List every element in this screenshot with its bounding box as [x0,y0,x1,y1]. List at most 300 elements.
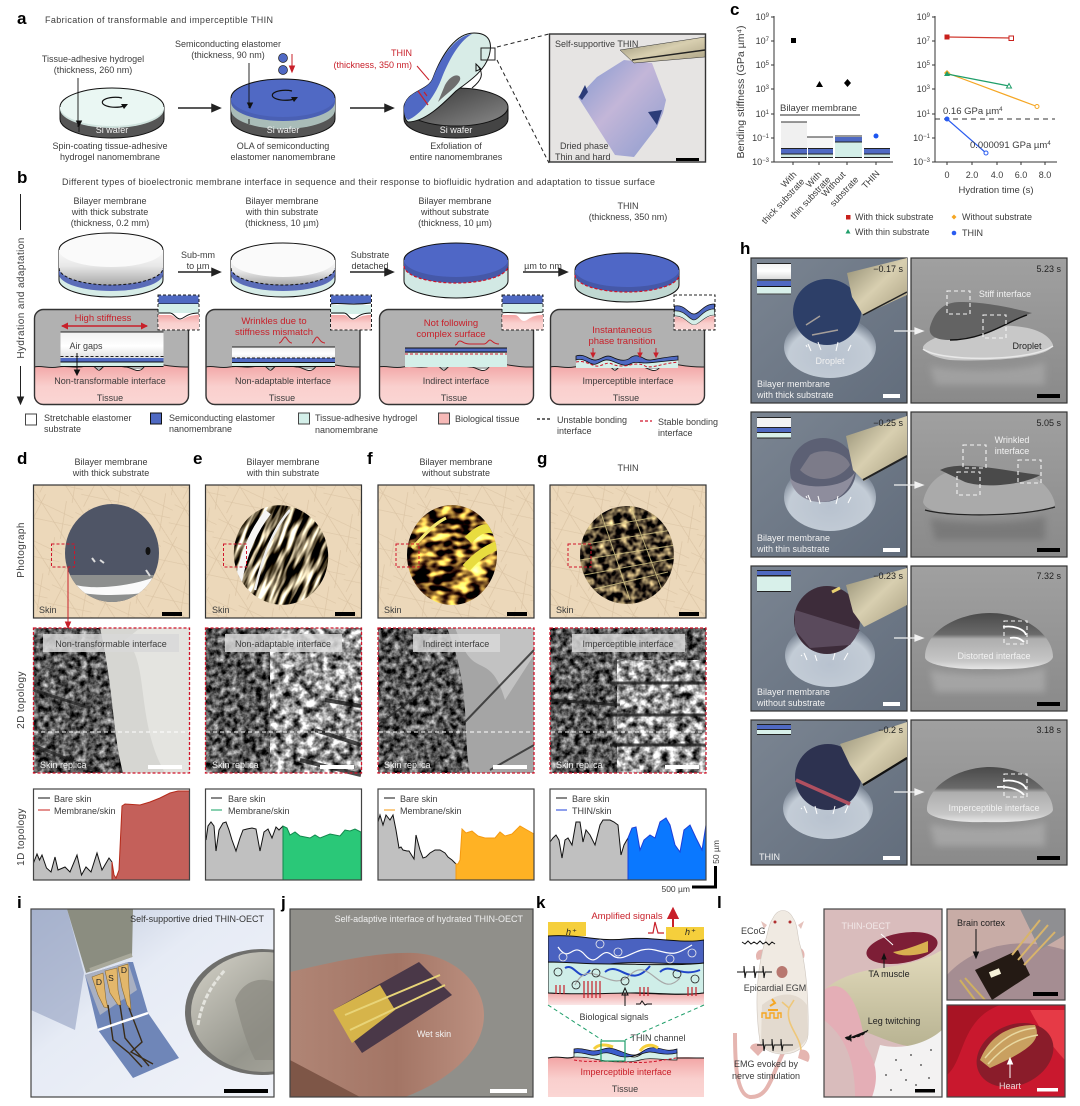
photo d: Skin [39,605,57,615]
series: without substrate [944,70,1039,108]
column 3 header [418,196,492,228]
right chart: axes and tick labels: 5 [927,61,931,67]
column 3 header: Bilayer membrane [418,196,492,206]
step 2 caption: OLA of semiconducting [237,141,329,151]
step 2 thickness: (thickness, 90 nm) [191,50,265,60]
left chart: axes and tick labels: 1 [766,110,770,116]
photo j: Self-adaptive interface of hydrated THIN-OECT [335,914,523,924]
legend [846,212,1032,238]
series: THIN [944,116,988,155]
left chart: axes and tick labels: 10 [752,133,762,143]
row 3 right photo [911,566,1067,711]
step 3 red thickness: (thickness, 350 nm) [333,60,412,70]
header g: THIN [618,463,638,473]
panel b: membrane interface types [16,168,718,438]
arrow: substrate detached: detached [351,261,389,271]
2D image e: Skin replica [212,760,259,770]
row 4 right photo [911,720,1067,865]
row 2 right photo: interface [995,446,1029,456]
label: photograph: Photograph [16,522,27,578]
row 3 left photo [751,566,907,711]
step 1 thickness: (thickness, 260 nm) [54,65,132,75]
photo j [290,909,533,1097]
2D image g: Imperceptible interface [582,639,674,649]
row 2 left photo: with thin substrate [756,544,830,554]
inset 1 [158,295,199,330]
legend: THIN [962,228,983,238]
row 1 right photo: 5.23 s [1036,264,1061,274]
legend: nanomembrane [169,424,232,434]
header d: Bilayer membrane [74,457,148,467]
row 3 left photo: −0.23 s [873,571,903,581]
left chart: axes and tick labels: 10 [756,84,766,94]
step 2 caption line 2: elastomer nanomembrane [230,152,336,162]
1D profile f: Bare skin [400,794,438,804]
legend: Unstable bonding [557,415,627,425]
inset 4 [674,295,715,330]
row 1 left photo: Droplet [815,356,845,366]
interface box 3 [379,309,534,405]
left chart: axes and tick labels: 10 [756,109,766,119]
row 4 left photo: THIN [759,852,780,862]
tissue label: Tissue [612,1084,638,1094]
2D image f [378,628,534,773]
1D profile g: Bare skin [572,794,610,804]
vertical axis: hydration and adaptation: Hydration and adaptation [16,237,27,359]
biological signals label: Biological signals [579,1012,649,1022]
row 3 right photo: Distorted interface [957,651,1031,661]
THIN channel label: THIN channel [630,1033,686,1043]
label: 2D topology: 2D topology [16,671,27,729]
step 1 disc: hydrogel spin-coating [60,78,164,138]
step 2 disc: semiconducting elastomer [231,54,335,138]
letter j: j [280,893,286,912]
column 1 header [71,196,149,228]
interface box 4 [550,309,705,405]
row 2 right photo: Wrinkled [995,435,1029,445]
legend: Stable bonding [658,417,718,427]
column 1 header: Bilayer membrane [73,196,147,206]
photo g [550,485,706,618]
biological signal arrow [622,988,652,1006]
step 3 red label: THIN [391,48,412,58]
photo: TA muscle [824,909,942,1097]
row 2 right photo: 5.05 s [1036,418,1061,428]
rat illustration [735,910,810,1097]
row 4 arrow [894,789,923,795]
arrow 2 [350,104,393,112]
letter l: l [717,893,722,912]
right chart: axes and tick labels: 10 [913,133,923,143]
right chart: axes and tick labels: 3 [927,85,931,91]
zoom dashed connectors [481,34,549,163]
column 4 header: THIN [618,201,638,211]
2D image d: Non-transformable interface [55,639,167,649]
legend: Biological tissue [455,414,520,424]
step 1 label: Tissue-adhesive hydrogel [42,54,144,64]
scale bar: 50 µm and 500 µm [661,840,721,894]
channel layer stack: h⁺ [685,927,696,937]
series: with thick substrate [944,34,1014,40]
photo e: Skin [212,605,230,615]
bilayer bracket label: Bilayer membrane [780,103,857,114]
interface box 1: Non-transformable interface [54,376,166,386]
2D image d: Skin replica [40,760,87,770]
right chart: axes and tick labels: 10 [917,84,927,94]
photo i: S [108,973,114,983]
letter i: i [17,893,22,912]
letter d: d [17,449,27,468]
left chart: axes and tick labels: 10 [756,36,766,46]
series: with thin substrate [944,71,1012,88]
right chart: axes and tick labels: 10 [917,60,927,70]
column 2 header: (thickness, 10 µm) [245,218,319,228]
channel layer stack [548,922,704,1010]
label: 1D topology: 1D topology [16,808,27,866]
right chart: axes and tick labels: 1 [927,110,931,116]
panel l: in vivo recordings [717,893,1065,1099]
data markers [791,38,878,138]
interface box 1 [34,309,189,405]
legend: nanomembrane [315,425,378,435]
left chart: axes and tick labels: 5 [766,61,770,67]
row 4 left photo [751,720,907,865]
step 3 caption line 2: entire nanomembranes [410,152,503,162]
interface box 1: Tissue [97,393,123,403]
legend: Semiconducting elastomer [169,413,275,423]
interface box 2: Non-adaptable interface [235,376,331,386]
rotated category labels: thick substrate [760,177,806,226]
legend: Stretchable elastomer [44,413,132,423]
imperceptible label: Imperceptible interface [580,1067,672,1077]
lower interface [548,1041,704,1097]
right chart: axes and tick labels: 10 [917,12,927,22]
left chart: axes and tick labels: 7 [766,37,770,43]
1D profile f [378,789,534,880]
disc 2: thin substrate [231,243,335,297]
photo f [378,485,534,618]
photo i: D [121,965,127,975]
step 3 disc: exfoliation [404,33,508,138]
right chart: axes and tick labels: 10 [913,157,923,167]
row labels d-g [16,522,27,866]
left chart: axes and tick labels: −1 [762,134,770,140]
row 2 left photo: Bilayer membrane [757,533,830,543]
left chart: axes and tick labels: 10 [756,12,766,22]
photo: brain cortex: Brain cortex [957,918,1006,928]
column 2 header: Bilayer membrane [245,196,319,206]
1D profile d: Bare skin [54,794,92,804]
photo: brain cortex [947,909,1065,1000]
panel k: amplification schematic [536,893,704,1097]
1D profile e: Bare skin [228,794,266,804]
left chart: axes and tick labels [752,12,893,167]
column 2 header [245,196,319,228]
left chart: axes and tick labels: 9 [766,13,770,19]
rotated category labels [760,169,881,226]
photo: self-supportive THIN: Thin and hard [555,152,611,162]
row 3 arrow [894,635,923,641]
rotated category labels: With [779,170,798,190]
disc 4: THIN [575,253,679,302]
row 2 left photo [751,412,907,557]
row 1 left photo: Bilayer membrane [757,379,830,389]
EMG trace [757,1039,793,1051]
arrow: sub-mm to µm: Sub-mm [181,250,215,260]
x-axis title: Hydration time (s) [959,185,1033,196]
photo j: Wet skin [417,1029,451,1039]
photo d [34,485,190,618]
EGM label: Epicardial EGM [744,983,806,993]
legend: substrate [44,424,81,434]
row 3 left photo: Bilayer membrane [757,687,830,697]
header f: without substrate [421,468,490,478]
step 2 disc: semiconducting elastomer: Si wafer [267,125,299,135]
rotated category labels: With [804,170,823,190]
panel i: dried THIN-OECT photo [18,896,275,1098]
interface box 3: complex surface [416,329,486,340]
amplification arrow [668,909,678,932]
row 1 arrow [894,328,923,334]
header d: with thick substrate [72,468,149,478]
photo: self-supportive THIN [550,34,706,162]
row 1 right photo: Droplet [1012,341,1042,351]
letter e: e [193,449,202,468]
2D image g [550,628,706,773]
right chart: axes and tick labels: 0 [944,170,950,180]
column 4 header: (thickness, 350 nm) [589,212,667,222]
header e [246,457,320,478]
right chart: axes and tick labels: 10 [917,109,927,119]
rotated category labels: substrate [828,175,860,208]
channel layer stack: h⁺ [566,927,577,937]
2D image f: Indirect interface [423,639,489,649]
vertical axis: hydration and adaptation [16,194,27,404]
photo: self-supportive THIN: Dried phase [560,141,609,151]
arrow: µm to nm: µm to nm [524,261,562,271]
photo: TA muscle: THIN-OECT [842,921,891,931]
photo f: Skin [384,605,402,615]
arrow: substrate detached [350,250,393,276]
panel letter a: a [17,9,27,28]
panel j: hydrated THIN-OECT on finger [280,893,533,1097]
bilayer bracket line [780,114,860,116]
right chart: axes and tick labels [913,12,1057,180]
interface box 3: Tissue [441,393,467,403]
column 1 header: (thickness, 0.2 mm) [71,218,149,228]
inset 2 [330,295,372,330]
row 1 left photo: with thick substrate [756,390,834,400]
panel a: fabrication of THIN [17,9,706,163]
photo: TA muscle: TA muscle [868,969,910,979]
right chart: axes and tick labels: 6.0 [1015,170,1027,180]
letter k: k [536,893,546,912]
panel letter c: c [730,0,739,19]
1D profile g [550,789,706,880]
rotated category labels: Without [819,169,848,199]
panel g: THIN [537,449,721,894]
value label 0.000091: 4 [1047,141,1051,147]
arrow: µm to nm [523,261,567,276]
row 4 left photo: −0.2 s [878,725,903,735]
interface box 1: High stiffness [75,313,132,324]
step 3 caption: Exfoliation of [430,141,482,151]
disc 1: thick substrate [59,233,163,297]
left chart: axes and tick labels: 10 [752,157,762,167]
left chart: axes and tick labels: 3 [766,85,770,91]
interface box 2: Wrinkles due to [241,316,307,327]
interface box 2: Tissue [269,393,295,403]
right chart: axes and tick labels: 9 [927,13,931,19]
2D image e: Non-adaptable interface [235,639,331,649]
letter g: g [537,449,547,468]
2D image e [206,628,362,775]
step 3 disc: exfoliation: Si wafer [440,125,472,135]
right chart: axes and tick labels: 10 [917,36,927,46]
photo: self-supportive THIN: Self-supportive THIN [555,39,638,49]
panel letter b: b [17,168,27,187]
panel f: without substrate [367,449,534,880]
EMG label: nerve stimulation [732,1071,800,1081]
1D profile e: Membrane/skin [228,806,290,816]
heading b: Different types of bioelectronic membrane interface in sequence and their response to biofluidic hydration and adaptation to tissue surface [62,177,655,187]
row 1 right photo [911,258,1067,403]
y-axis title: Bending stiffness (GPa µm⁴) [735,26,747,158]
interface box 1: Air gaps [69,341,103,351]
1D profile d: Membrane/skin [54,806,116,816]
photo i [30,908,275,1098]
header e: Bilayer membrane [246,457,320,467]
2D image f: Skin replica [384,760,431,770]
column 1 header: with thick substrate [71,207,148,217]
inset 3 [502,295,543,330]
arrow 1 [178,104,220,112]
left chart: axes and tick labels: 10 [756,60,766,70]
photo: TA muscle: Leg twitching [868,1016,920,1026]
interface box 4: Instantaneous [592,325,652,336]
legend: interface [658,428,693,438]
photo i: Self-supportive dried THIN-OECT [130,914,265,924]
value label 0.16: 4 [999,107,1003,113]
header f: Bilayer membrane [419,457,493,467]
interface box 4: phase transition [588,336,656,347]
interface box 3: Indirect interface [423,376,489,386]
header f [419,457,493,478]
membrane stack icons [781,122,890,158]
panel h: droplet hydration sequence [740,239,1067,865]
ECoG trace [742,941,775,945]
heading a: Fabrication of transformable and imperceptible THIN [45,15,273,25]
interface box 4: Tissue [613,393,639,403]
arrow: substrate detached: Substrate [351,250,389,260]
row 4 right photo: Imperceptible interface [948,803,1040,813]
disc 3: without substrate [404,243,508,298]
row 3 left photo: without substrate [756,698,825,708]
column 3 header: without substrate [420,207,489,217]
interface box 2: stiffness mismatch [235,327,313,338]
letter h: h [740,239,750,258]
1D profile f: Membrane/skin [400,806,462,816]
ECoG label: ECoG [741,926,766,936]
step 1 caption line 2: hydrogel nanomembrane [60,152,160,162]
right chart: axes and tick labels: 8.0 [1039,170,1051,180]
arrow: sub-mm to µm [178,250,220,276]
row 2 arrow [894,482,923,488]
left chart: axes and tick labels: −3 [762,158,770,164]
1D profile e [206,789,362,880]
row 3 right photo: 7.32 s [1036,571,1061,581]
legend: interface [557,426,592,436]
column 4 header [589,201,667,222]
row 4 right photo: 3.18 s [1036,725,1061,735]
right chart: axes and tick labels: 4.0 [991,170,1003,180]
photo i: D [96,977,102,987]
interface box 4: Imperceptible interface [582,376,674,386]
amplified pulse [648,922,664,933]
scale bar: 50 µm and 500 µm: 500 µm [661,884,690,894]
arrow: sub-mm to µm: to µm [187,261,209,271]
red arrow to zoom view [66,567,70,628]
step 1 disc: hydrogel spin-coating: Si wafer [96,125,128,135]
letter f: f [367,449,373,468]
EGM trace [737,966,772,978]
right chart: axes and tick labels: −3 [923,158,931,164]
2D image d [33,628,190,773]
panel d: thick substrate [17,449,190,880]
right chart: axes and tick labels: 7 [927,37,931,43]
threshold dashed line [935,118,1055,120]
photo: heart [947,1005,1065,1099]
value label 0.000091: 0.000091 GPa µm [970,140,1047,151]
panel e: thin substrate [193,449,362,880]
EMG label: EMG evoked by [734,1059,799,1069]
photo e [204,484,362,619]
photo g: Skin [556,605,574,615]
legend: Without substrate [962,212,1032,222]
row 1 left photo [751,258,907,403]
interface box 3: Not following [424,318,478,329]
row 1 right photo: Stiff interface [979,289,1031,299]
amplified signals label: Amplified signals [591,911,663,922]
legend: With thin substrate [855,227,930,237]
column 3 header: (thickness, 10 µm) [418,218,492,228]
2D image g: Skin replica [556,760,603,770]
step 2 label: Semiconducting elastomer [175,39,281,49]
legend: With thick substrate [855,212,934,222]
green zoom lines [548,1005,704,1040]
EMG label [732,1059,800,1081]
panel c: bending stiffness charts [730,0,1057,238]
scale bar: 50 µm and 500 µm: 50 µm [711,840,721,864]
1D profile g: THIN/skin [572,806,612,816]
rotated category labels: thin substrate [788,175,832,221]
photo: heart: Heart [999,1081,1021,1091]
1D profile d [34,789,190,880]
header e: with thin substrate [246,468,319,478]
right chart: axes and tick labels: −1 [923,134,931,140]
right chart: axes and tick labels: 2.0 [966,170,978,180]
row 1 left photo: −0.17 s [873,264,903,274]
step 1 caption: Spin-coating tissue-adhesive [52,141,168,151]
column 2 header: with thin substrate [245,207,318,217]
row 2 left photo: −0.25 s [873,418,903,428]
row 2 right photo [911,412,1067,557]
legend: Tissue-adhesive hydrogel [315,413,417,423]
legend [26,413,718,438]
value label 0.16: 0.16 GPa µm [943,106,999,117]
rotated category labels: THIN [860,169,881,191]
header d [72,457,149,478]
